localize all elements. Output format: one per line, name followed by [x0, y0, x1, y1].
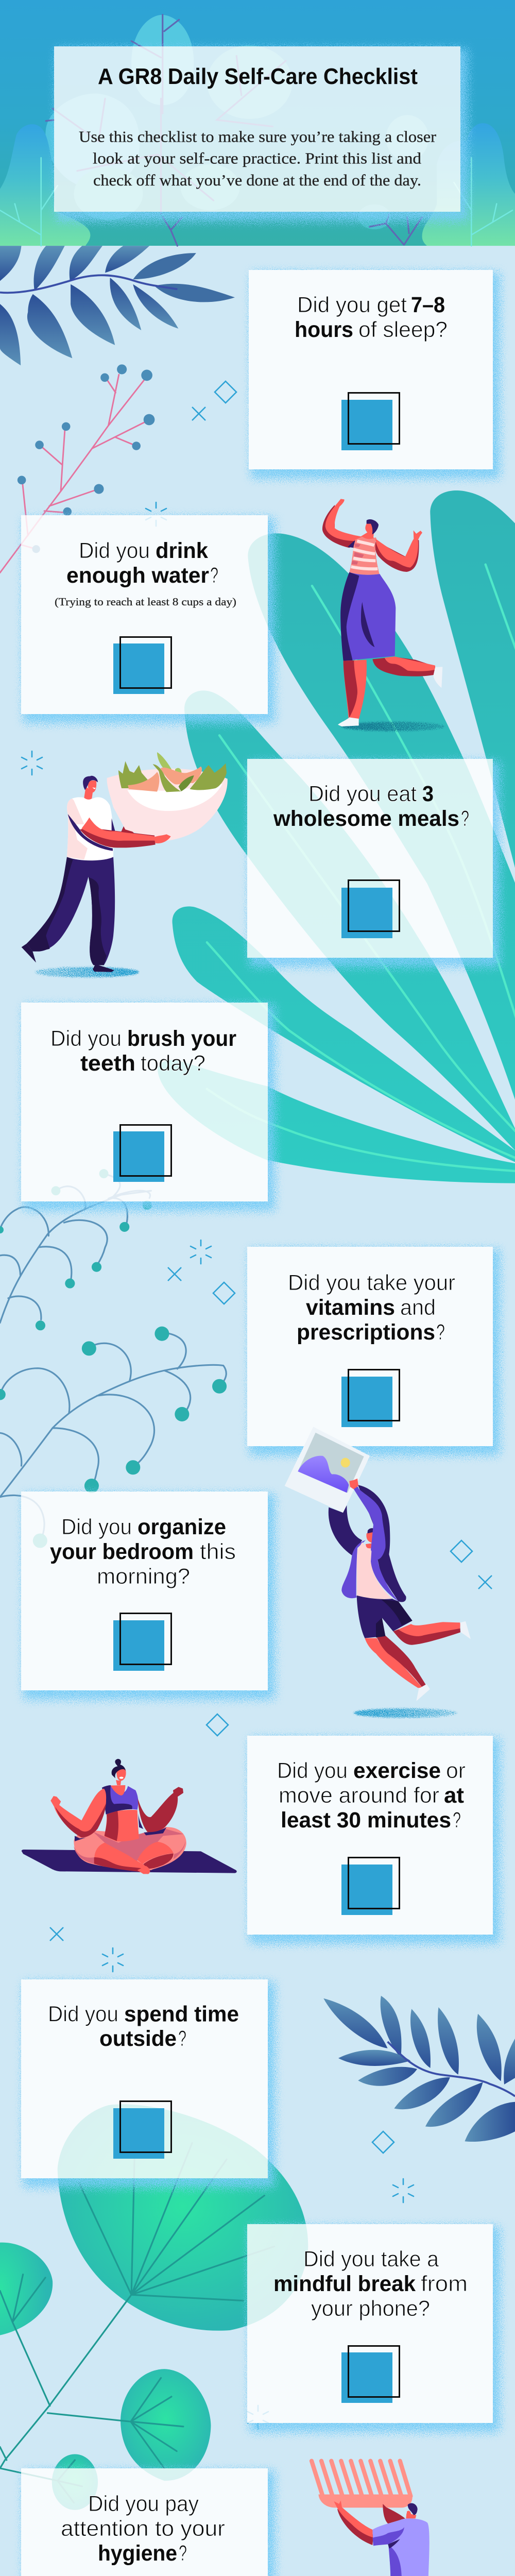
panel: bedroom: Did you	[61, 1515, 132, 1539]
figure: man carrying salad bowl	[22, 752, 228, 972]
panel: hygiene: ?	[179, 2541, 187, 2566]
panel: vitamins: ?	[436, 1320, 445, 1345]
panel: hygiene: hygiene	[98, 2541, 177, 2566]
panel: sleep: of sleep?	[358, 317, 448, 342]
big teal leaves	[158, 490, 515, 1183]
panel: outside: ?	[178, 2026, 186, 2051]
panel: phone break: your phone?	[311, 2296, 430, 2321]
panel: bedroom	[21, 1492, 268, 1690]
intro paragraph	[79, 128, 437, 189]
panel: hygiene: attention to your	[61, 2516, 225, 2541]
figure: woman meditating on mat	[22, 1759, 237, 1874]
intro paragraph: check off what you’ve done at the end of the day.	[93, 171, 421, 189]
checkbox	[113, 1125, 171, 1182]
panel: bedroom: this	[200, 1539, 236, 1564]
checkbox	[341, 1858, 400, 1915]
figure: dancing woman	[322, 499, 442, 726]
figure: man holding giant comb	[312, 2461, 430, 2576]
panel: sleep	[249, 270, 493, 469]
panel: phone break: from	[421, 2272, 468, 2296]
panel: hygiene: Did you pay	[88, 2492, 199, 2516]
curling branch: lower	[0, 1327, 227, 1548]
panel: sleep: Did you get	[297, 293, 407, 317]
panel: water: Did you	[79, 538, 150, 563]
panel: exercise: least 30 minutes	[281, 1808, 451, 1833]
panel: water: (Trying to reach at least 8 cups a day)	[55, 596, 236, 608]
panel: vitamins: Did you take your	[288, 1270, 455, 1295]
panel: vitamins	[247, 1247, 493, 1446]
panel: water: drink	[156, 538, 208, 563]
panel: bedroom: your bedroom	[50, 1539, 194, 1564]
panel: teeth: teeth	[80, 1051, 135, 1076]
checkbox	[341, 880, 400, 938]
panel: exercise: exercise	[353, 1758, 441, 1783]
panel: exercise: ?	[453, 1808, 461, 1833]
ground shadows under figures	[35, 722, 457, 2576]
pink twig with blue berries	[0, 364, 154, 573]
panel: water: ?	[210, 563, 218, 588]
panel: meals	[247, 759, 493, 958]
comb	[312, 2461, 413, 2507]
panel: header	[54, 46, 460, 212]
panel: water	[21, 515, 268, 714]
panel: outside	[21, 1979, 268, 2178]
decorative diamonds, crosses and sparkles	[22, 381, 492, 2576]
panel: outside: spend time	[124, 2002, 239, 2027]
panel: outside: outside	[99, 2026, 177, 2051]
leaf branch: right side	[323, 1996, 515, 2142]
panel: bedroom: organize	[138, 1515, 226, 1539]
panel: hygiene	[21, 2468, 268, 2576]
panel: exercise: or	[446, 1758, 466, 1783]
leaf branch: top left	[0, 246, 235, 365]
panel: water: enough water	[66, 563, 209, 588]
panel: sleep: 7–8	[411, 293, 445, 317]
panel: exercise: Did you	[277, 1758, 348, 1783]
checkbox	[341, 1369, 400, 1427]
panel: sleep: hours	[295, 317, 353, 342]
figure: man jumping with photo	[285, 1427, 471, 1701]
panel: vitamins: vitamins	[306, 1295, 395, 1320]
panel: phone break: Did you take a	[303, 2247, 439, 2272]
panel: meals: 3	[422, 782, 434, 806]
panel: exercise	[247, 1736, 493, 1935]
panel: meals: ?	[461, 806, 469, 831]
checkbox	[341, 2346, 400, 2403]
panel: teeth: brush your	[127, 1026, 236, 1051]
checkbox	[113, 1614, 171, 1671]
panel: exercise: move around for	[279, 1783, 439, 1808]
panel: meals: wholesome meals	[273, 806, 459, 831]
panel: bedroom: morning?	[97, 1564, 190, 1589]
panel: vitamins: prescriptions	[297, 1320, 435, 1345]
header background with trees	[0, 0, 515, 246]
checkbox	[113, 2101, 171, 2159]
intro paragraph: Use this checklist to make sure you’re taking a closer	[79, 128, 437, 145]
panel: phone break: mindful break	[273, 2272, 416, 2296]
checkbox	[113, 637, 171, 694]
checkbox	[341, 393, 400, 450]
curling branch: upper	[0, 1169, 152, 1330]
title: A GR8 Daily Self-Care Checklist	[98, 64, 418, 89]
panel: outside: Did you	[48, 2002, 118, 2027]
round teal leaves	[0, 2104, 308, 2510]
panel: phone break	[247, 2224, 493, 2423]
panel: teeth: today?	[141, 1051, 205, 1076]
panel: vitamins: and	[400, 1295, 436, 1320]
panel: meals: Did you eat	[308, 782, 417, 806]
panel: teeth: Did you	[50, 1026, 122, 1051]
intro paragraph: look at your self-care practice. Print this list and	[93, 149, 422, 167]
panel: exercise: at	[444, 1783, 464, 1808]
panel: teeth	[21, 1003, 268, 1201]
